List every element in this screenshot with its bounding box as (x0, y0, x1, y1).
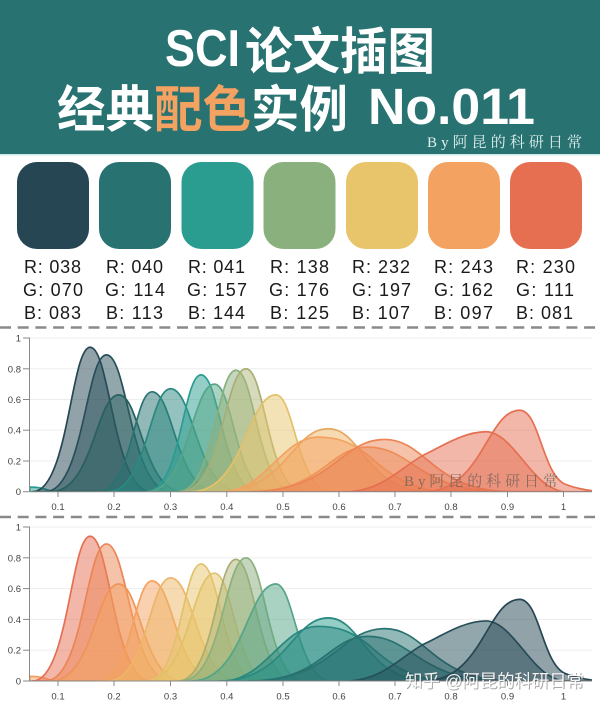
header signature: By阿昆的科研日常 (427, 134, 582, 151)
axis labels (8, 334, 566, 513)
title line 2: No.011 (368, 78, 535, 135)
axis labels: 0.8 (8, 553, 21, 564)
axis labels: 0.4 (220, 692, 233, 702)
title line 1: SCI (165, 20, 240, 78)
axis labels: 0.1 (51, 502, 65, 513)
axis labels: 1 (16, 522, 21, 534)
RGB values: R: 232 (352, 257, 410, 277)
RGB values: B: 081 (516, 303, 573, 323)
title line 1 (165, 20, 435, 80)
density curves (30, 347, 598, 492)
title line 2: 经典配色实例 (57, 82, 348, 138)
title line 1: 论文插图 (245, 24, 435, 80)
RGB values: R: 243 (434, 257, 493, 277)
axis labels: 1 (561, 502, 566, 513)
RGB values: B: 083 (24, 303, 81, 323)
axis labels: 0.4 (220, 502, 233, 513)
axis labels: 0.7 (388, 502, 402, 513)
RGB values: G: 114 (105, 280, 165, 300)
axes and ticks (23, 338, 592, 497)
axis labels: 0.3 (164, 502, 177, 513)
axes and ticks (23, 527, 592, 686)
axis labels: 0.5 (276, 502, 290, 513)
RGB values: B: 125 (270, 303, 329, 323)
RGB values: R: 230 (516, 257, 575, 277)
axis labels: 0.2 (8, 456, 21, 468)
density curves (30, 536, 598, 681)
axis labels: 0.3 (164, 692, 177, 702)
RGB values: G: 111 (516, 280, 574, 300)
RGB values: R: 040 (106, 257, 163, 277)
RGB values: R: 038 (24, 257, 81, 277)
axis labels: 0.6 (8, 395, 21, 406)
axis labels: 0.7 (388, 692, 402, 702)
axis labels: 1 (16, 334, 21, 344)
RGB values (23, 257, 575, 323)
axis labels: 0.4 (8, 615, 21, 626)
RGB values: B: 144 (188, 303, 245, 323)
axis labels: 0.2 (8, 646, 21, 657)
Zhihu watermark: 知乎 @阿昆的科研日常 (406, 672, 585, 692)
axis labels: 0.2 (107, 692, 121, 702)
chart signature: By阿昆的科研日常 (404, 473, 558, 490)
RGB values: G: 197 (352, 280, 411, 300)
axis labels: 0.8 (444, 692, 458, 702)
RGB values: B: 107 (352, 303, 410, 323)
Zhihu watermark: 知乎 @阿昆的科研日常 (405, 671, 584, 691)
axis labels: 0.6 (332, 692, 346, 702)
bottom density chart, warm to dark (8, 522, 598, 702)
axis labels: 0.1 (51, 692, 65, 702)
RGB values: G: 070 (23, 280, 83, 300)
RGB values: B: 113 (106, 303, 163, 323)
RGB values: G: 176 (269, 280, 329, 300)
axis labels: 0.9 (501, 502, 514, 513)
RGB values: G: 162 (434, 280, 493, 300)
axis labels: 0.4 (8, 426, 21, 437)
axis labels: 0.8 (444, 502, 458, 513)
axis labels (8, 522, 566, 702)
RGB values: R: 041 (188, 257, 245, 277)
axis labels: 0.2 (107, 502, 121, 513)
RGB values: B: 097 (434, 303, 493, 323)
axis labels: 0 (16, 676, 21, 688)
axis labels: 0.6 (8, 584, 21, 595)
header banner (0, 0, 600, 156)
axis labels: 0.5 (276, 692, 290, 702)
colour palette swatches (17, 162, 582, 249)
axis labels: 0 (16, 487, 21, 498)
title line 2 (57, 78, 535, 138)
axis labels: 0.6 (332, 502, 346, 513)
RGB values: R: 138 (270, 257, 329, 277)
axis labels: 0.8 (8, 364, 21, 375)
axis labels: 1 (561, 692, 566, 702)
axis labels: 0.9 (501, 692, 514, 702)
RGB values: G: 157 (187, 280, 247, 300)
top density chart, dark to warm (8, 334, 598, 513)
